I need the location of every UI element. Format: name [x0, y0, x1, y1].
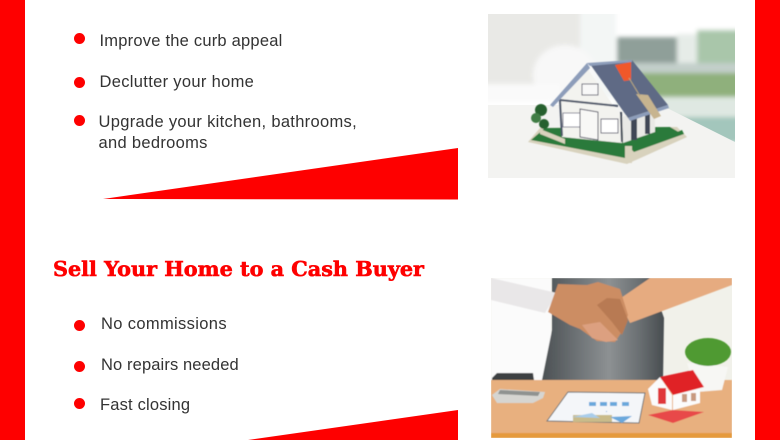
bullet: no commissions: No commissions	[101, 315, 227, 333]
bullet list: cash buyer benefits	[74, 315, 239, 414]
bullet: declutter your home: Declutter your home	[100, 73, 254, 91]
heading: sell your home to a cash buyer: Sell Your Home to a Cash Buyer	[53, 257, 425, 281]
bullet: upgrade rooms	[74, 113, 357, 152]
bullet: fast closing: Fast closing	[100, 396, 190, 414]
left red side bar	[0, 0, 25, 440]
bullet list: preparing the home	[74, 32, 357, 152]
bullet: improve the curb appeal: Improve the curb appeal	[100, 32, 282, 50]
right red side bar	[755, 0, 780, 440]
bullet: upgrade rooms: and bedrooms	[98, 134, 208, 152]
photo: model house with keys	[488, 14, 735, 178]
bullet: no repairs needed: No repairs needed	[101, 356, 239, 374]
photo: handshake over desk	[491, 278, 732, 438]
bullet: upgrade rooms: Upgrade your kitchen, bathrooms,	[98, 113, 357, 131]
